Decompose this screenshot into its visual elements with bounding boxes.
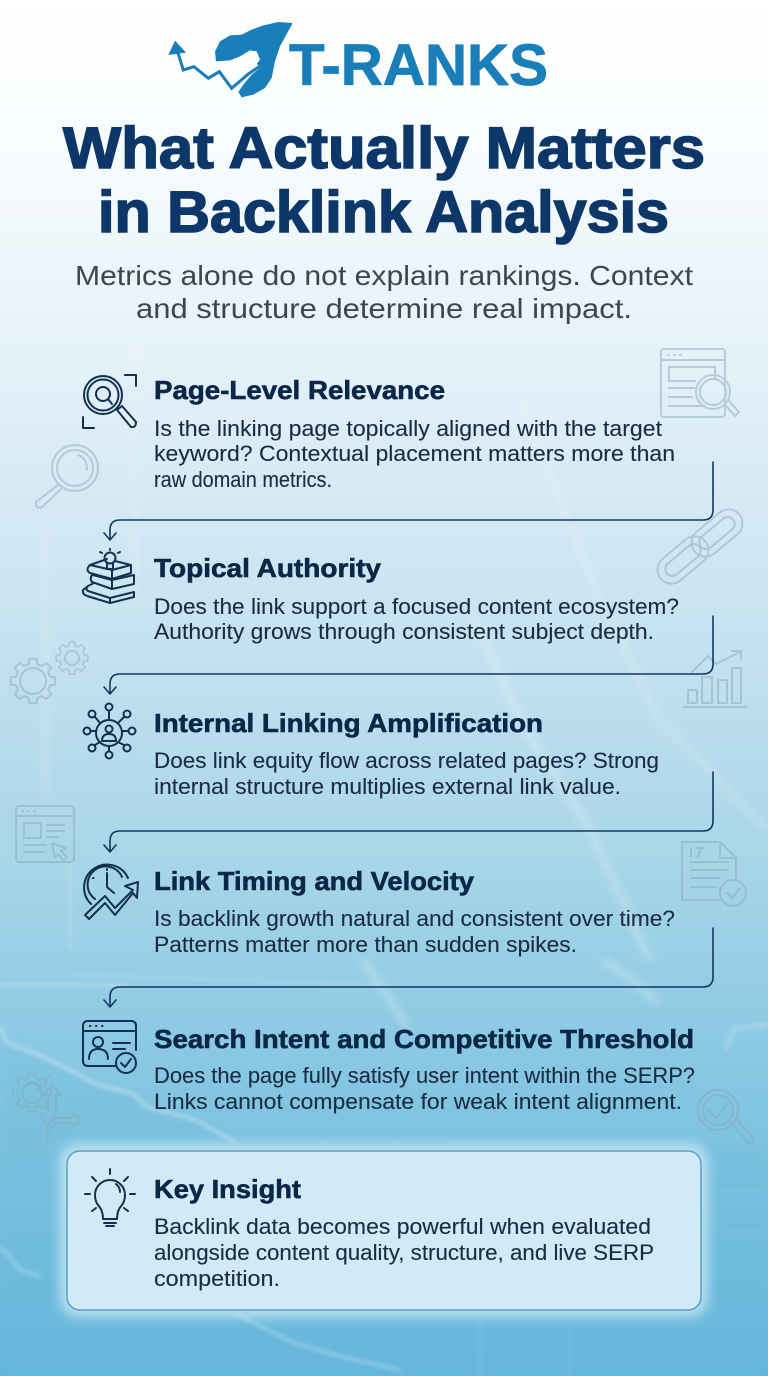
section: Topical Authority xyxy=(83,549,679,644)
body text: Patterns matter more than sudden spikes. xyxy=(154,932,577,957)
heading: Link Timing and Velocity xyxy=(154,866,475,896)
body text xyxy=(154,594,679,644)
title xyxy=(63,116,705,245)
body text xyxy=(154,416,675,492)
decorative icon: gear and direction arrows xyxy=(13,1074,81,1145)
logo wordmark: T-RANKS xyxy=(289,33,548,98)
decorative icon: bar chart xyxy=(684,651,746,707)
icon: light bulb xyxy=(85,1169,135,1226)
heading: Key Insight xyxy=(154,1174,301,1204)
arrow: section 2 to section 3 xyxy=(104,616,713,694)
heading: Topical Authority xyxy=(154,553,382,583)
decorative icon: magnifier xyxy=(36,445,98,508)
heading: Internal Linking Amplification xyxy=(154,708,543,738)
body text: alongside content quality, structure, and live SERP xyxy=(154,1240,654,1265)
body text: Links cannot compensate for weak intent alignment. xyxy=(154,1089,682,1114)
title: What Actually Matters xyxy=(63,116,705,181)
decorative icon: search check xyxy=(698,1090,753,1143)
subtitle: and structure determine real impact. xyxy=(136,293,632,324)
icon: browser profile with check xyxy=(83,1021,136,1073)
body text: Does the link support a focused content ecosystem? xyxy=(154,594,679,619)
title: in Backlink Analysis xyxy=(98,180,669,245)
subtitle: Metrics alone do not explain rankings. Context xyxy=(75,260,693,291)
body text: Does the page fully satisfy user intent within the SERP? xyxy=(154,1063,695,1088)
icon: books with light bulb xyxy=(83,549,134,603)
body text xyxy=(154,748,659,799)
decorative icon: browser with magnifier xyxy=(661,349,739,417)
body text: keyword? Contextual placement matters more than xyxy=(154,441,675,466)
icon: clock and rising arrow xyxy=(84,865,138,919)
icon: person in network xyxy=(84,704,136,758)
decorative icon: gears xyxy=(11,642,88,703)
section: Search Intent and Competitive Threshold xyxy=(83,1021,695,1114)
body text: raw domain metrics. xyxy=(154,467,332,492)
arrow: section 3 to section 4 xyxy=(104,772,713,852)
logo: dinosaur and rising arrow mark xyxy=(168,22,293,97)
decorative icon: document with check xyxy=(682,842,746,906)
body text: Authority grows through consistent subject depth. xyxy=(154,619,654,644)
body text: Is backlink growth natural and consistent over time? xyxy=(154,906,675,931)
body text: Backlink data becomes powerful when evaluated xyxy=(154,1214,651,1239)
body text: internal structure multiplies external link value. xyxy=(154,774,621,799)
arrow: section 1 to section 2 xyxy=(104,462,713,540)
arrow: section 4 to section 5 xyxy=(104,928,713,1007)
decorative icon: chain link xyxy=(652,504,748,589)
decorative icon: browser with cursor xyxy=(16,806,74,862)
icon: magnifier in focus frame xyxy=(83,375,136,428)
heading: Search Intent and Competitive Threshold xyxy=(154,1024,694,1054)
heading: Page-Level Relevance xyxy=(154,375,445,405)
logo xyxy=(168,22,548,98)
body text: Does link equity flow across related pages? Strong xyxy=(154,748,659,773)
subtitle xyxy=(75,260,693,324)
panel: key insight xyxy=(60,1144,708,1317)
body text xyxy=(154,1214,654,1291)
section: Page-Level Relevance xyxy=(83,375,675,492)
body text: competition. xyxy=(154,1266,280,1291)
body text xyxy=(154,906,675,957)
body text: Is the linking page topically aligned with the target xyxy=(154,416,662,441)
section: Link Timing and Velocity xyxy=(84,865,675,957)
panel background xyxy=(60,1144,708,1317)
section: Internal Linking Amplification xyxy=(84,704,659,799)
body text xyxy=(154,1063,695,1114)
